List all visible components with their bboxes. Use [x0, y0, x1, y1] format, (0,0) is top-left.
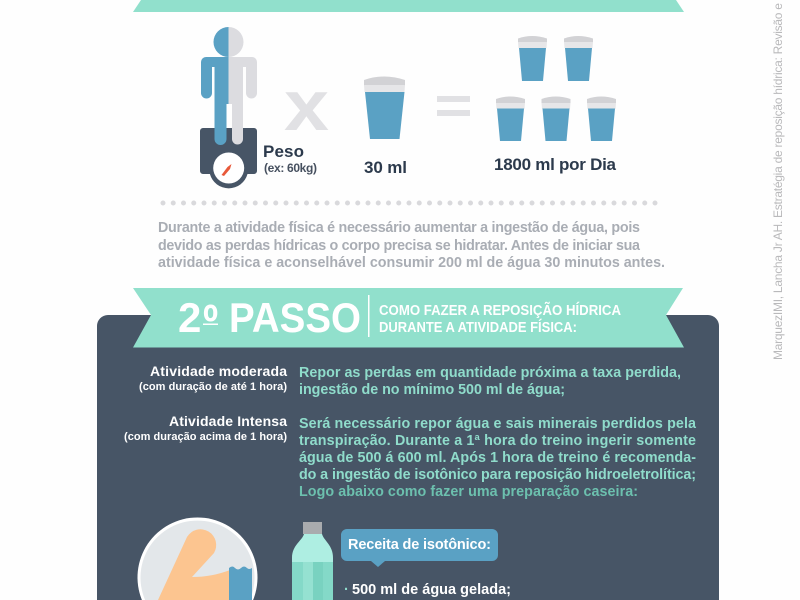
icon: small glasses [496, 36, 616, 141]
circle rim [138, 517, 258, 600]
dial [213, 152, 244, 184]
dial needle [222, 164, 232, 176]
icon: large glass [364, 76, 405, 139]
person blue half [201, 27, 228, 145]
paragraph: water intake during activity: atividade física e aconselhável consumir 200 ml de água 30 minutos antes. [158, 255, 665, 271]
icon: person on scale [200, 27, 257, 188]
heading: 2º passo [178, 294, 361, 350]
scale [200, 128, 257, 188]
text: intense activity: transpiração. Durante a 1ª hora do treino ingerir somente [299, 433, 696, 449]
panel: step 2 [97, 315, 719, 600]
water [292, 562, 333, 600]
glass 2 [564, 36, 593, 81]
label: intense activity: Atividade Intensa [169, 413, 287, 429]
top ribbon [133, 0, 684, 12]
text: intense activity: água de 500 á 600 ml. Após 1 hora de treino é recomenda- [299, 450, 696, 466]
text: moderate activity: Repor as perdas em quantidade próxima a taxa perdida, [299, 365, 681, 381]
text: moderate activity [299, 365, 681, 398]
arm [158, 529, 230, 600]
label: example weight: (ex: 60kg) [264, 161, 317, 175]
heading divider [368, 295, 370, 337]
paragraph: water intake during activity: devido as perdas hídricas o corpo precisa se hidratar. Antes de iniciar sua [158, 238, 641, 254]
text: intense activity [299, 416, 697, 500]
label: 1800 ml por dia: 1800 ml por Dia [494, 155, 617, 174]
text: intense activity: Logo abaixo como fazer uma preparação caseira: [299, 484, 638, 500]
paragraph: water intake during activity [158, 220, 665, 271]
person grey half [228, 27, 257, 144]
light band [303, 562, 313, 600]
subheading: COMO FAZER A REPOSIÇÃO HÍDRICA [379, 301, 621, 319]
heading: 2º passo: º [203, 294, 218, 350]
callout: recipe [341, 529, 498, 567]
multiplication sign: x [284, 67, 329, 146]
text: intense activity: Será necessário repor água e sais minerais perdidos pela [299, 416, 697, 432]
icon: bottle [292, 522, 333, 600]
label: moderate activity: Atividade moderada [150, 363, 287, 379]
label: peso: Peso [263, 142, 304, 161]
heading: 2º passo: PASSO [229, 294, 361, 341]
glass 3 [496, 96, 525, 141]
label: moderate activity [139, 363, 287, 393]
label: 30 ml: 30 ml [364, 158, 407, 177]
side citation: MarquezIMI, Lancha Jr AH. Estratégia de reposição hídrica: Revisão e [771, 3, 785, 360]
subheading: DURANTE A ATIVIDADE FÍSICA: [379, 319, 577, 336]
body [292, 534, 333, 600]
label: intense activity: (com duração acima de 1 hora) [124, 431, 287, 443]
equals sign [437, 96, 470, 116]
cap [303, 522, 322, 534]
ribbon: step 2 [133, 288, 684, 348]
glass 1 [518, 36, 547, 81]
circle [140, 521, 254, 600]
callout: recipe: Receita de isotônico: [348, 537, 491, 553]
text: intense activity: do a ingestão de isotônico para reposição hidroeletrolítica; [299, 467, 696, 483]
heading: 2º passo: 2 [178, 294, 201, 341]
label: intense activity [124, 413, 287, 443]
ingredient: 500 ml de água gelada; [352, 582, 511, 598]
icon: flexed arm [138, 517, 258, 600]
water [229, 566, 252, 600]
glass 4 [542, 96, 570, 141]
dark band [313, 562, 323, 600]
label: moderate activity: (com duração de até 1 hora) [139, 381, 287, 393]
ingredient: · [344, 582, 349, 598]
subheading [379, 301, 621, 336]
glass 5 [587, 96, 616, 141]
text: moderate activity: ingestão de no mínimo 500 ml de água; [299, 382, 565, 398]
paragraph: water intake during activity: Durante a atividade física é necessário aumentar a ingestão de água, pois [158, 220, 640, 236]
dotted divider [163, 200, 657, 206]
